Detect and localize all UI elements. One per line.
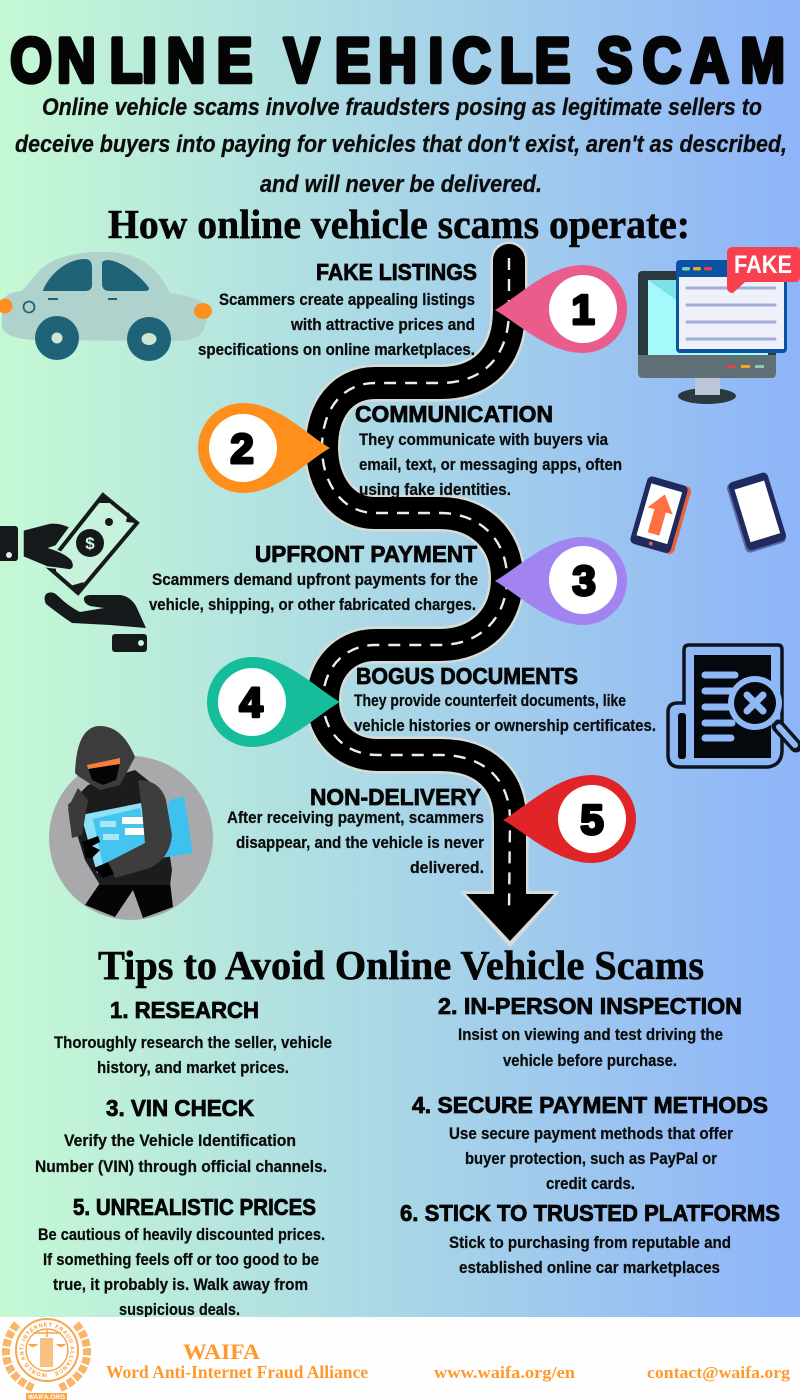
tip 3: Number (VIN) through official channels. [35, 1157, 327, 1176]
step 4 text: vehicle histories or ownership certificates. [354, 716, 656, 735]
step 1 text: with attractive prices and [290, 315, 475, 334]
step 5 text [227, 784, 484, 877]
tip 6 [400, 1200, 780, 1277]
icon: hands exchanging money [0, 495, 147, 652]
tip 6: 6. STICK TO TRUSTED PLATFORMS [400, 1200, 780, 1226]
tip 4: credit cards. [546, 1174, 635, 1193]
tip 2: Insist on viewing and test driving the [458, 1025, 723, 1044]
tip 5: If something feels off or too good to be [43, 1250, 319, 1269]
pin 4: 4 [239, 679, 263, 726]
footer: www.waifa.org/en [434, 1363, 576, 1382]
tip 3 [35, 1095, 327, 1176]
pin 5: 5 [580, 796, 604, 843]
icon: hooded thief [49, 726, 213, 920]
tip 4: 4. SECURE PAYMENT METHODS [412, 1092, 768, 1118]
tip 1 [54, 997, 332, 1077]
footer: Word Anti-Internet Fraud Alliance [106, 1362, 368, 1382]
step 5 text: delivered. [410, 858, 484, 877]
title: ONLINE [10, 26, 252, 96]
pin 3 [495, 537, 627, 625]
icon: hands exchanging money: $ [85, 534, 95, 553]
heading: tips: Tips to Avoid Online Vehicle Scams [98, 942, 704, 988]
tip 2: vehicle before purchase. [503, 1051, 677, 1070]
step 4 text: They provide counterfeit documents, like [354, 691, 626, 710]
tip 2: 2. IN-PERSON INSPECTION [438, 993, 742, 1019]
icon: monitor with fake window: FAKE [734, 251, 792, 279]
step 2 text: using fake identities. [359, 480, 511, 499]
logo: WORLD ANTI INTERNET FRAUD ALLIANCE [20, 1322, 74, 1378]
step 1 text: FAKE LISTINGS [316, 259, 477, 285]
pin 2: 2 [230, 425, 254, 472]
tip 2 [438, 993, 742, 1070]
step 3 text: vehicle, shipping, or other fabricated charges. [149, 595, 476, 614]
step 4 text [354, 663, 656, 735]
step 3 text [149, 541, 478, 614]
step 4 text: BOGUS DOCUMENTS [356, 663, 578, 689]
tip 1: history, and market prices. [97, 1058, 289, 1077]
title [10, 26, 785, 96]
tip 6: Stick to purchasing from reputable and [449, 1233, 731, 1252]
step 2 text [355, 401, 622, 499]
step 5 text: disappear, and the vehicle is never [236, 833, 484, 852]
tip 1: 1. RESEARCH [110, 997, 259, 1023]
tip 4: Use secure payment methods that offer [449, 1124, 733, 1143]
step 2 text: They communicate with buyers via [359, 430, 608, 449]
intro text [15, 94, 787, 198]
step 2 text: COMMUNICATION [355, 401, 553, 427]
tip 3: Verify the Vehicle Identification [64, 1131, 296, 1150]
step 5 text: NON-DELIVERY [310, 784, 481, 810]
tip 5: true, it probably is. Walk away from [53, 1275, 308, 1294]
title: SCAM [597, 26, 785, 96]
step 1 text: specifications on online marketplaces. [198, 340, 475, 359]
step 1 text: Scammers create appealing listings [219, 290, 475, 309]
pin 5 [503, 775, 636, 863]
icon: car [0, 252, 212, 361]
tip 3: 3. VIN CHECK [106, 1095, 254, 1121]
pin 1: 1 [571, 286, 595, 333]
tip 5 [38, 1194, 325, 1319]
icon: document with magnifier [668, 645, 796, 767]
road with arrow [322, 258, 558, 946]
pin 2 [198, 403, 330, 493]
step 2 text: email, text, or messaging apps, often [359, 455, 622, 474]
step 3 text: Scammers demand upfront payments for the [152, 570, 478, 589]
pin 3: 3 [572, 557, 596, 604]
title: VEHICLE [284, 26, 570, 96]
step 1 text [198, 259, 477, 359]
pin 4 [207, 657, 340, 747]
intro text: and will never be delivered. [260, 171, 542, 198]
icon: monitor with fake window [638, 247, 800, 404]
step 3 text: UPFRONT PAYMENT [255, 541, 477, 567]
tip 5: suspicious deals. [119, 1300, 240, 1319]
logo [2, 1318, 92, 1400]
step 5 text: After receiving payment, scammers [227, 808, 484, 827]
heading: how scams operate: How online vehicle scams operate: [108, 201, 690, 247]
tip 1: Thoroughly research the seller, vehicle [54, 1033, 332, 1052]
tip 4 [412, 1092, 768, 1193]
tip 4: buyer protection, such as PayPal or [465, 1149, 717, 1168]
tip 5: Be cautious of heavily discounted prices. [38, 1225, 325, 1244]
pin 1 [495, 265, 627, 353]
tip 6: established online car marketplaces [459, 1258, 720, 1277]
icon: phones [629, 471, 788, 555]
footer: contact@waifa.org [647, 1363, 791, 1382]
tip 5: 5. UNREALISTIC PRICES [73, 1194, 316, 1220]
footer: WAIFA [183, 1339, 260, 1364]
footer [0, 1317, 800, 1400]
